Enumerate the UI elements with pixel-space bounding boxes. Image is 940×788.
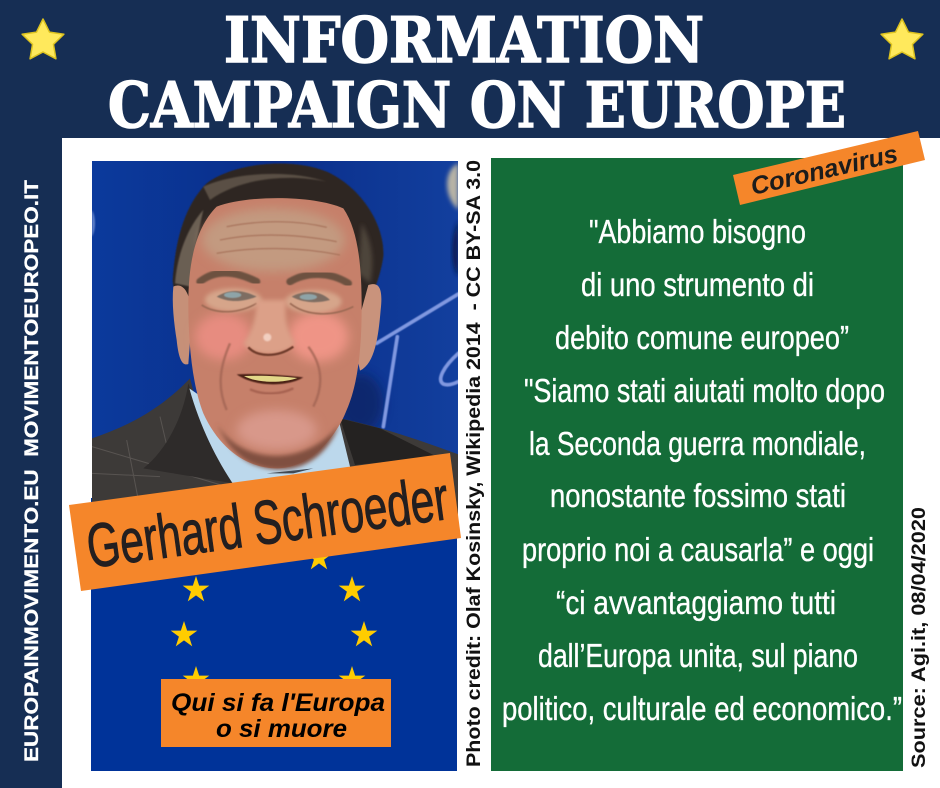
chin shadow — [217, 423, 340, 469]
quote text: debito comune europeo” — [555, 319, 849, 356]
panel: name banner — [69, 453, 461, 591]
quote text: “ci avvantaggiamo tutti — [556, 584, 836, 621]
panel: EU flag — [91, 498, 457, 771]
callout: slogan — [161, 679, 391, 747]
photo credit: Photo credit: Olaf Kosinsky, Wikipedia 2014 - CC BY-SA 3.0 — [464, 160, 485, 767]
title: INFORMATION — [224, 3, 704, 77]
quote text: nonostante fossimo stati — [550, 477, 846, 514]
eyes — [217, 291, 257, 301]
ears — [173, 286, 192, 364]
quote text — [502, 213, 902, 727]
cheeks — [195, 313, 252, 360]
quote text: la Seconda guerra mondiale, — [529, 425, 866, 462]
tag: Coronavirus: Coronavirus — [748, 140, 901, 201]
white content panel — [62, 138, 940, 788]
panel: quote — [491, 158, 903, 771]
forehead light — [202, 208, 345, 272]
icon: star right — [881, 19, 923, 59]
source: Source: Agi.it, 08/04/2020 — [909, 507, 930, 768]
eye bags — [205, 288, 262, 312]
hair — [173, 163, 383, 313]
quote text: dall’Europa unita, sul piano — [538, 637, 858, 674]
face — [188, 198, 362, 468]
jacket — [92, 378, 458, 514]
panel: portrait photo — [92, 161, 460, 530]
sidebar website text: EUROPAINMOVIMENTO.EU MOVIMENTOEUROPEO.IT — [21, 180, 43, 762]
nasolabial folds — [221, 343, 320, 410]
quote text: "Abbiamo bisogno — [589, 213, 806, 250]
quote text: di uno strumento di — [581, 266, 814, 303]
flag stars — [171, 544, 377, 691]
title — [108, 3, 846, 142]
name text: Gerhard Schroeder — [83, 464, 453, 582]
forehead wrinkles — [217, 222, 340, 255]
brows — [200, 273, 257, 282]
nose — [243, 300, 295, 354]
icon: star left — [22, 19, 64, 59]
mouth — [237, 374, 303, 384]
signature — [377, 294, 458, 427]
shirt — [189, 388, 352, 487]
callout: slogan: Qui si fa l'Europa — [171, 689, 385, 717]
callout: slogan: o si muore — [216, 715, 347, 743]
quote text: proprio noi a causarla” e oggi — [522, 531, 874, 568]
tag: Coronavirus — [733, 131, 925, 205]
